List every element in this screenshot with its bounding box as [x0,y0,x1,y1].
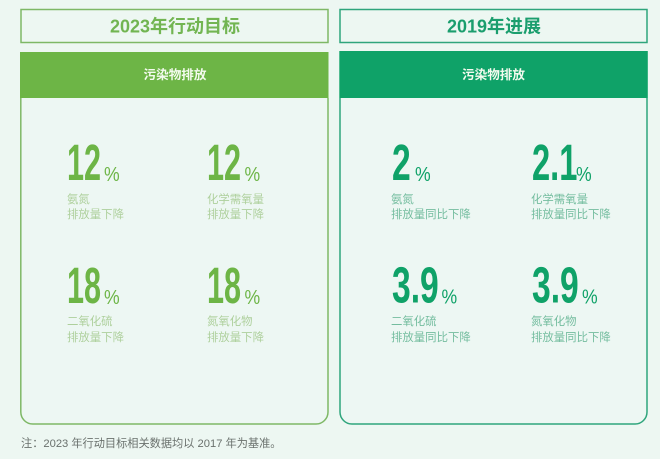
stat: ammonia nitrogen 2%: 排放量同比下降 [391,207,471,221]
stat: nitrogen oxides 3.9%: % [582,286,598,309]
heading box: 2023 targets [21,10,328,42]
heading box: 2019 progress: 2019年进展 [447,16,541,36]
stat: sulfur dioxide 3.9%: 排放量同比下降 [391,330,471,344]
stat: sulfur dioxide 18%: 排放量下降 [67,330,124,344]
stat: nitrogen oxides 18%: 氮氧化物 [207,314,253,328]
stat: nitrogen oxides 3.9%: 排放量同比下降 [531,330,611,344]
stat: chemical oxygen demand 12%: 排放量下降 [207,207,264,221]
stat: ammonia nitrogen 2%: % [415,164,431,186]
stat: ammonia nitrogen 12%: 12 [67,134,101,191]
stat: chemical oxygen demand 12%: % [244,164,260,186]
stat: ammonia nitrogen 12%: % [104,164,120,186]
stat: nitrogen oxides 3.9% [531,258,611,344]
stat: ammonia nitrogen 2%: 氨氮 [391,192,414,206]
stat: nitrogen oxides 18%: 18 [207,257,241,314]
band: pollutant emissions: 污染物排放 [462,67,525,82]
stat: nitrogen oxides 3.9%: 3.9 [532,258,579,314]
stat: chemical oxygen demand 2.1% [531,135,611,221]
heading box: 2019 progress [340,10,647,42]
stat: chemical oxygen demand 12% [207,134,264,221]
footnote: 注：2023 年行动目标相关数据均以 2017 年为基准。 [21,436,281,450]
stat: sulfur dioxide 18%: 二氧化硫 [67,314,113,328]
stat: sulfur dioxide 18%: 18 [67,257,101,314]
stat: chemical oxygen demand 2.1%: 排放量同比下降 [531,207,611,221]
panel: 2019 progress [339,10,648,424]
stat: chemical oxygen demand 12%: 化学需氧量 [207,192,264,206]
stat: ammonia nitrogen 2%: 2 [392,135,411,192]
band: pollutant emissions: 污染物排放 [144,67,207,82]
stat: nitrogen oxides 18%: 排放量下降 [207,330,264,344]
card: 2019 pollutant emissions [339,51,648,424]
stat: sulfur dioxide 18% [67,257,124,344]
stat: chemical oxygen demand 2.1%: % [576,164,592,186]
stat: sulfur dioxide 18%: % [104,287,120,309]
stat: chemical oxygen demand 2.1%: 化学需氧量 [531,192,588,206]
heading box: 2023 targets: 2023年行动目标 [110,16,240,36]
stat: ammonia nitrogen 2% [391,135,471,221]
stat: sulfur dioxide 3.9%: 二氧化硫 [391,314,437,328]
panel: 2023 targets [20,10,328,424]
stat: ammonia nitrogen 12% [67,134,124,221]
band: pollutant emissions [20,52,328,98]
stat: ammonia nitrogen 12%: 氨氮 [67,192,90,206]
stat: nitrogen oxides 3.9%: 氮氧化物 [531,314,577,328]
stat: chemical oxygen demand 12%: 12 [207,134,241,191]
stat: ammonia nitrogen 12%: 排放量下降 [67,207,124,221]
card: 2023 pollutant emissions [20,52,328,424]
stat: chemical oxygen demand 2.1%: 2.1 [532,135,577,192]
stat: nitrogen oxides 18% [207,257,264,344]
band: pollutant emissions [339,51,648,98]
stat: nitrogen oxides 18%: % [244,287,260,309]
stat: sulfur dioxide 3.9%: % [442,286,457,309]
stat: sulfur dioxide 3.9% [391,258,471,344]
stat: sulfur dioxide 3.9%: 3.9 [392,258,439,314]
